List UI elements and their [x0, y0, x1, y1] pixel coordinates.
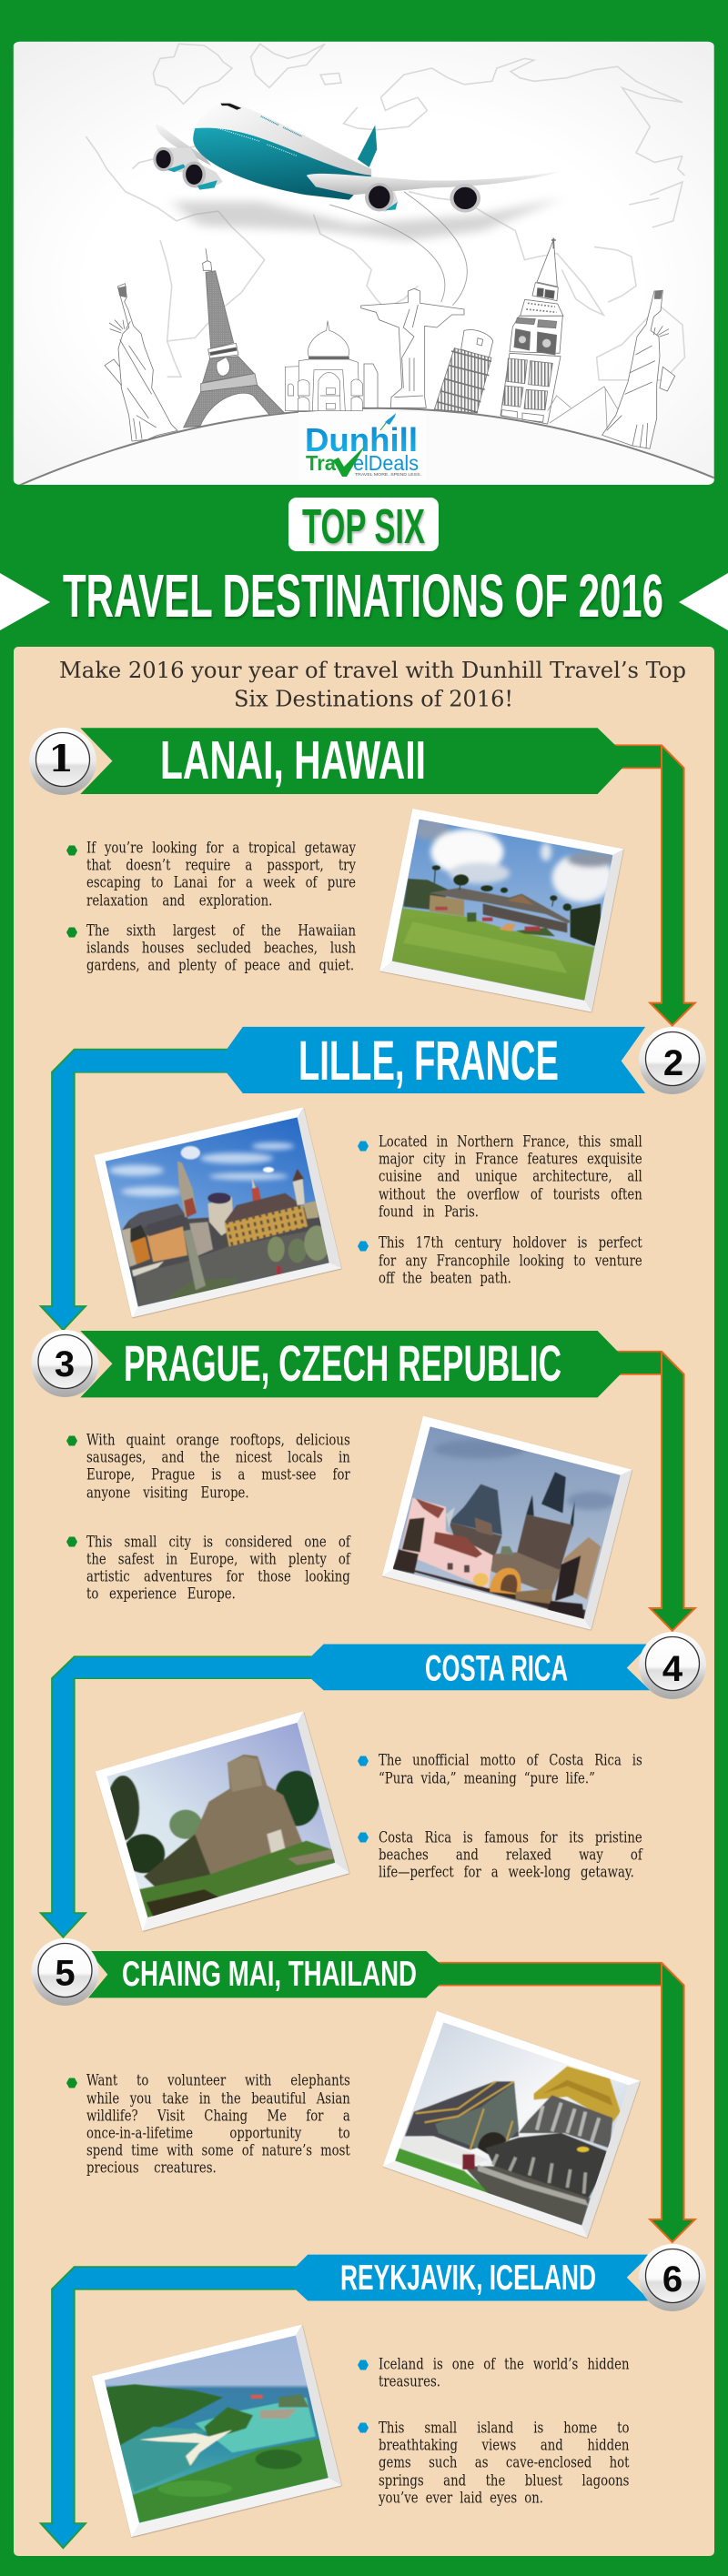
number badge 5 — [31, 1938, 98, 2006]
text block: Lanai paragraph 2: islands houses secluded beaches, lush — [86, 940, 356, 958]
text block: Lille paragraph 1: without the overflow of tourists often — [379, 1185, 642, 1203]
text block: Prague paragraph 2: artistic adventures for those looking — [86, 1568, 350, 1586]
text block: Prague paragraph 1: Europe, Prague is a must-see for — [86, 1466, 350, 1484]
number badge 4: 4 — [662, 1649, 683, 1689]
engines — [166, 147, 201, 173]
text block: Costa Rica paragraph 2: Costa Rica is famous for its pristine — [379, 1828, 642, 1846]
number badge 3: 3 — [55, 1344, 75, 1384]
text block: Costa Rica paragraph 2: life—perfect for a week-long getaway. — [379, 1864, 634, 1882]
heading: top six — [288, 498, 439, 554]
text block: Lille paragraph 1: found in Paris. — [379, 1202, 479, 1221]
text block: Lanai paragraph 2: gardens, and plenty of peace and quiet. — [86, 957, 354, 975]
text block: Lille paragraph 1: cuisine and unique architecture, all — [379, 1168, 642, 1186]
text block: Reykjavik paragraph 1: Iceland is one of the world’s hidden — [379, 2355, 629, 2373]
landmarks: left group — [105, 248, 362, 441]
arrow: blue down — [41, 1656, 320, 1937]
text block: Reykjavik paragraph 1 — [379, 2355, 630, 2391]
number badge 2 — [639, 1027, 706, 1094]
panel: beige content background — [14, 647, 714, 2556]
photo: Chiang Mai temple — [383, 2011, 640, 2238]
destination 4 banner and arrow — [41, 1644, 650, 1937]
text block: Costa Rica paragraph 1: “Pura vida,” meaning “pure life.” — [379, 1769, 595, 1787]
bullet marker — [66, 1537, 77, 1546]
number badge 6 — [639, 2244, 706, 2311]
text block: Reykjavik paragraph 2: This small island is home to — [379, 2419, 629, 2437]
destination 2 banner and arrow — [41, 1027, 645, 1330]
bullet marker — [358, 1141, 369, 1152]
icon: eiffel tower — [184, 248, 285, 428]
icon: logo plane — [380, 413, 396, 430]
arrow: green down — [431, 1963, 695, 2242]
text block: Chaing Mai paragraph: Want to volunteer with elephants — [86, 2072, 350, 2090]
intro text — [59, 658, 686, 711]
text block: Chaing Mai paragraph: wildlife? Visit Chaing Me for a — [86, 2107, 350, 2125]
bullet marker — [66, 2078, 77, 2088]
panel: header illustration — [14, 42, 715, 488]
icon: big ben — [500, 238, 563, 424]
number badge 2: 2 — [663, 1043, 683, 1083]
text block: Prague paragraph 2: This small city is considered one of — [86, 1533, 350, 1551]
text block: Prague paragraph 1: sausages, and the nicest locals in — [86, 1449, 350, 1467]
globe surface — [18, 408, 715, 488]
destination 5 arrow and banner — [88, 1951, 695, 2242]
text block: Costa Rica paragraph 1 — [379, 1752, 642, 1787]
left wing — [156, 125, 211, 166]
ribbon — [80, 728, 662, 794]
title: LILLE, FRANCE — [298, 1030, 559, 1092]
text block: Lanai paragraph 1: If you’re looking for a tropical getaway — [86, 839, 356, 857]
icon: taj mahal right minaret — [364, 364, 378, 408]
intro text: Six Destinations of 2016! — [234, 686, 513, 711]
destination 6 banner and arrow — [41, 2255, 650, 2548]
number badge 3 — [31, 1330, 98, 1397]
title: LANAI, HAWAII — [160, 730, 426, 790]
logo: Dunhill Travel Deals — [298, 412, 426, 480]
bullet marker — [66, 928, 77, 937]
text block: Prague paragraph 2: to experience Europe. — [86, 1585, 236, 1604]
text block: Costa Rica paragraph 2 — [379, 1828, 643, 1882]
pyramids — [548, 387, 618, 434]
heading: top six: TOP SIX — [302, 499, 425, 554]
arrow: green down — [612, 1352, 695, 1631]
ribbon — [75, 1644, 650, 1690]
number badge 6: 6 — [662, 2259, 682, 2299]
arrow: blue down — [41, 2267, 307, 2548]
text block: Chaing Mai paragraph — [86, 2072, 350, 2178]
icon: leaning tower of pisa — [434, 330, 493, 413]
ribbon — [75, 1027, 645, 1093]
text block: Reykjavik paragraph 2: gems such as cave-enclosed hot — [379, 2454, 629, 2472]
bullet marker — [358, 1756, 369, 1766]
ribbon — [75, 2255, 650, 2300]
fuselage — [204, 107, 371, 200]
title: CHAING MAI, THAILAND — [122, 1955, 417, 1994]
title: COSTA RICA — [425, 1648, 568, 1688]
bullet marker — [66, 846, 77, 855]
text block: Lille paragraph 1: major city in France features exquisite — [379, 1151, 642, 1169]
destination 3 arrow and banner — [80, 1331, 695, 1631]
icon: logo check mark — [333, 446, 365, 477]
text block: Reykjavik paragraph 2: breathtaking views and hidden — [379, 2437, 629, 2455]
intro text: Make 2016 your year of travel with Dunhill Travel’s Top — [59, 658, 686, 683]
text block: Reykjavik paragraph 2: springs and the bluest lagoons — [379, 2471, 629, 2490]
text block: Lanai paragraph 1: that doesn’t require a passport, try — [86, 857, 356, 875]
icon: statue of liberty left — [105, 284, 177, 441]
arrow: blue down — [41, 1050, 232, 1330]
text block: Lille paragraph 2: for any Francophile looking to venture — [379, 1252, 642, 1270]
plane shadow — [172, 198, 561, 240]
text block: Lille paragraph 1: Located in Northern France, this small — [379, 1132, 642, 1151]
bullet marker — [358, 1832, 369, 1843]
photo: Lille square — [94, 1107, 341, 1317]
icon: taj mahal — [285, 321, 362, 411]
logo: Dunhill Travel Deals: TRAVEL MORE. SPEND LESS. — [355, 472, 421, 477]
text block: Lanai paragraph 1: relaxation and exploration. — [86, 891, 273, 910]
number badge 1 — [29, 728, 96, 795]
text block: Lille paragraph 2 — [379, 1234, 642, 1287]
photo: Lanai lodge — [379, 809, 623, 1011]
arrow: green down — [612, 745, 695, 1025]
text block: Lille paragraph 1 — [379, 1132, 642, 1221]
logo: Dunhill Travel Deals: Tra — [306, 451, 336, 475]
ribbon — [88, 1951, 662, 1997]
bullet marker — [358, 2360, 369, 2370]
title: REYKJAVIK, ICELAND — [340, 2259, 596, 2298]
number badge 4 — [639, 1632, 706, 1699]
bullet marker — [358, 1241, 369, 1252]
text block: Chaing Mai paragraph: while you take in the beautiful Asian — [86, 2089, 350, 2108]
text block: Chaing Mai paragraph: once-in-a-lifetime opportunity to — [86, 2125, 350, 2143]
right wing — [307, 171, 561, 195]
text block: Reykjavik paragraph 1: treasures. — [379, 2373, 440, 2391]
text block: Lille paragraph 2: off the beaten path. — [379, 1269, 511, 1287]
text block: Lanai paragraph 2: The sixth largest of the Hawaiian — [86, 921, 356, 940]
landmarks: right group — [361, 238, 675, 448]
text block: Lanai paragraph 1 — [86, 839, 356, 910]
text block: Costa Rica paragraph 1: The unofficial motto of Costa Rica is — [379, 1752, 642, 1770]
number badge 5: 5 — [55, 1954, 76, 1994]
text block: Reykjavik paragraph 2 — [379, 2419, 630, 2507]
text block: Chaing Mai paragraph: precious creatures. — [86, 2159, 217, 2178]
text block: Lanai paragraph 2 — [86, 921, 356, 975]
logo: Dunhill Travel Deals: Dunhill — [305, 421, 418, 458]
text block: Prague paragraph 1: anyone visiting Europe. — [86, 1484, 249, 1502]
bullet marker — [66, 1435, 77, 1446]
text block: Reykjavik paragraph 2: you’ve ever laid eyes on. — [379, 2489, 543, 2507]
photo: Iceland bay — [92, 2325, 341, 2537]
text block: Chaing Mai paragraph: spend time with some of nature’s most — [86, 2142, 350, 2160]
destination 1 banner and arrow — [80, 728, 695, 1025]
world map outline — [86, 44, 685, 380]
plane — [153, 101, 561, 213]
tail fin — [358, 125, 377, 167]
photo: Prague bridge towers — [382, 1416, 632, 1630]
photo: Costa Rica church ruin — [96, 1711, 349, 1931]
text block: Prague paragraph 1: With quaint orange rooftops, delicious — [86, 1431, 350, 1449]
bullet marker — [358, 2423, 369, 2432]
text block: Lanai paragraph 1: escaping to Lanai for a week of pure — [86, 874, 356, 892]
logo: Dunhill Travel Deals: elDeals — [353, 451, 419, 475]
text block: Costa Rica paragraph 2: beaches and relaxed way of — [379, 1846, 642, 1865]
ribbon — [80, 1331, 662, 1397]
text block: Prague paragraph 2: the safest in Europe, with plenty of — [86, 1550, 350, 1568]
text block: Prague paragraph 1 — [86, 1431, 350, 1502]
text block: Lille paragraph 2: This 17th century holdover is perfect — [379, 1234, 642, 1253]
icon: christ the redeemer — [361, 288, 464, 408]
text block: Prague paragraph 2 — [86, 1533, 351, 1604]
number badge 1: 1 — [48, 738, 74, 780]
icon: statue of liberty right — [602, 290, 675, 448]
